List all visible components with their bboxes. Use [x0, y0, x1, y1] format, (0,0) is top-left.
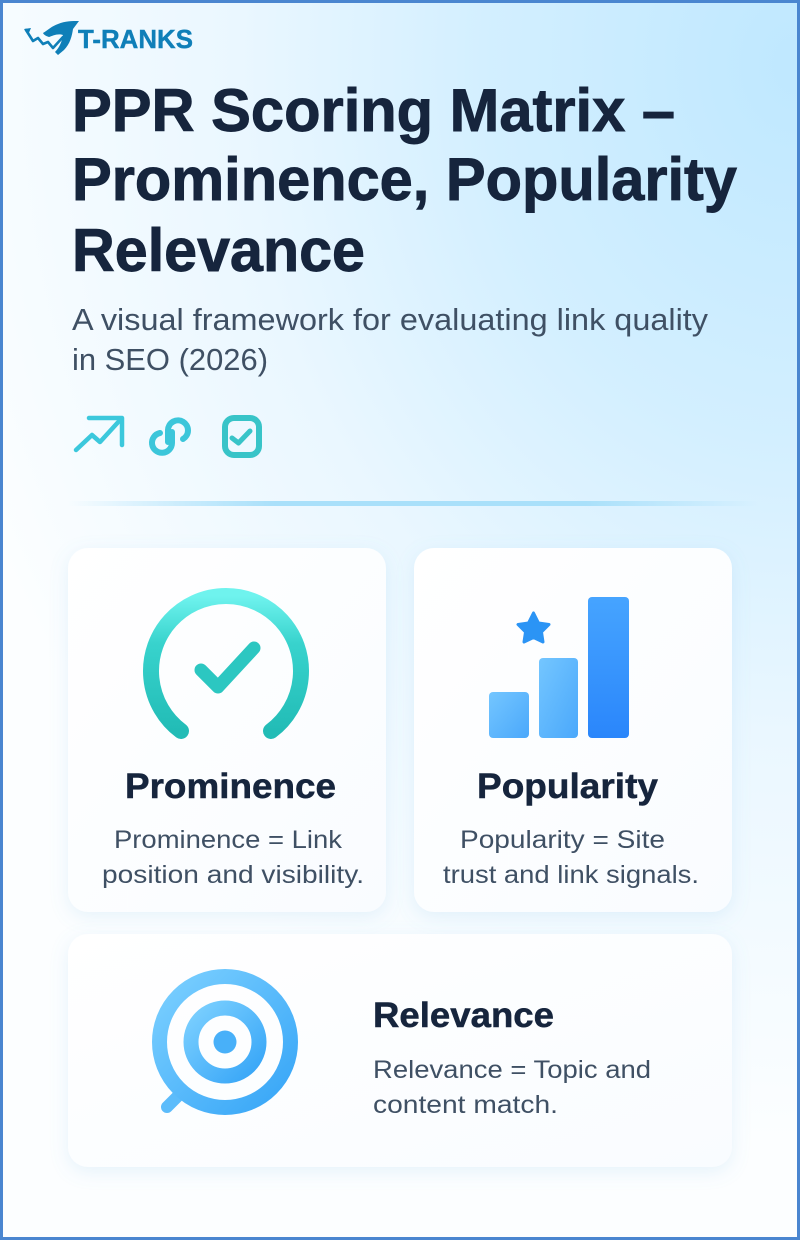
- title: [72, 77, 738, 284]
- description: content match.: [373, 1091, 558, 1119]
- panel: popularity: [414, 548, 732, 912]
- heading: Prominence: [125, 767, 336, 806]
- panel: prominence: [68, 548, 386, 912]
- heading: Popularity: [477, 767, 659, 806]
- logo: T-RANKS: [24, 21, 193, 55]
- title: Prominence, Popularity: [72, 146, 738, 213]
- logo wordmark: T-RANKS: [78, 24, 193, 54]
- icon: bars and star: [489, 597, 629, 738]
- divider: [68, 501, 758, 506]
- description: trust and link signals.: [443, 861, 699, 889]
- icon: chain link: [152, 420, 188, 453]
- description: Relevance = Topic and: [373, 1056, 651, 1084]
- description: Prominence = Link: [114, 826, 343, 854]
- description: [443, 826, 699, 889]
- description: Popularity = Site: [460, 826, 665, 854]
- icon: checkbox: [225, 418, 259, 455]
- card background: [414, 548, 732, 912]
- subtitle: A visual framework for evaluating link quality: [72, 302, 709, 337]
- description: [373, 1056, 651, 1119]
- card background: [68, 934, 732, 1167]
- icon: gauge with check: [151, 596, 301, 731]
- logo mark: zigzag arrow and bird: [24, 21, 79, 55]
- description: position and visibility.: [102, 861, 364, 889]
- subtitle: in SEO (2026): [72, 342, 268, 377]
- card background: [68, 548, 386, 912]
- title: Relevance: [72, 217, 365, 284]
- panel: relevance: [68, 934, 732, 1167]
- icon: trend arrow: [76, 418, 122, 450]
- icon: target: [160, 976, 290, 1108]
- description: [102, 826, 364, 889]
- subtitle: [72, 302, 709, 377]
- heading: Relevance: [373, 996, 554, 1035]
- title: PPR Scoring Matrix –: [72, 77, 675, 144]
